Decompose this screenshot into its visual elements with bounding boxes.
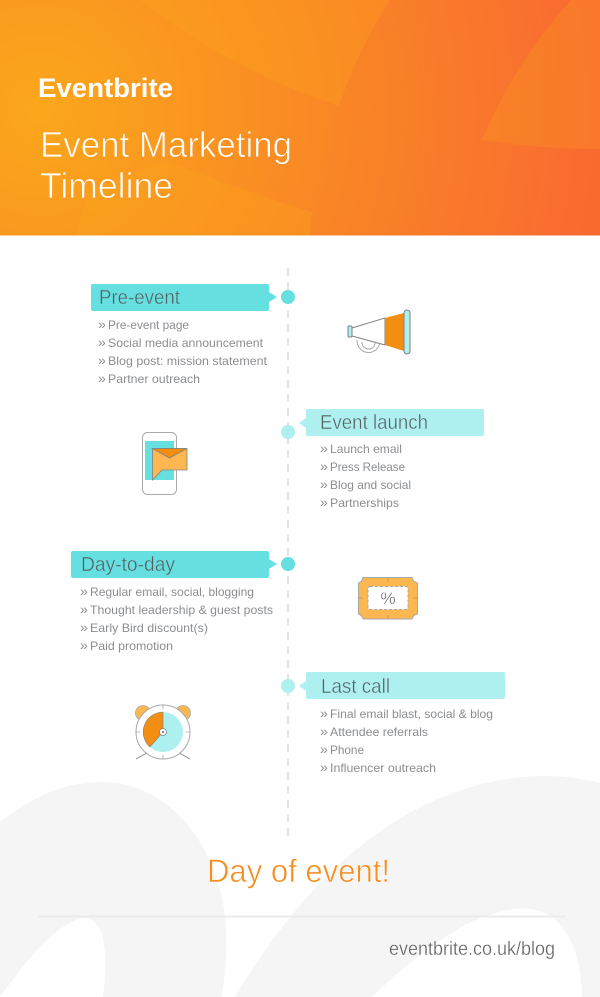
- list: launch tasks: »: [320, 440, 328, 456]
- list: day-to-day tasks: »: [80, 601, 88, 617]
- footer URL: eventbrite.co.uk/blog: [389, 939, 555, 960]
- list: last call tasks: »: [320, 705, 328, 721]
- timeline dot: [281, 557, 295, 571]
- list: last call tasks: Influencer outreach: [330, 761, 436, 775]
- list: day-to-day tasks: »: [80, 619, 88, 635]
- list: launch tasks: Press Release: [330, 460, 405, 474]
- list: launch tasks: Blog and social: [330, 478, 411, 492]
- header banner: [0, 0, 600, 236]
- label: Pre-event: [91, 284, 277, 311]
- icon: discount ticket: %: [380, 589, 396, 608]
- title: [40, 124, 292, 206]
- title: Event Marketing: [40, 124, 292, 165]
- closing heading: Day of event: Day of event!: [207, 853, 390, 889]
- list: last call tasks: Phone: [330, 743, 364, 757]
- icon: megaphone: [348, 310, 410, 354]
- list: day-to-day tasks: Paid promotion: [90, 639, 173, 653]
- list: last call tasks: Attendee referrals: [330, 725, 428, 739]
- list: Pre-event tasks: »: [98, 370, 106, 386]
- list: day-to-day tasks: [80, 583, 273, 653]
- list: last call tasks: Final email blast, social & blog: [330, 707, 493, 721]
- list: Pre-event tasks: »: [98, 334, 106, 350]
- title: Timeline: [40, 165, 173, 206]
- label: Event launch: [299, 409, 484, 436]
- list: last call tasks: »: [320, 759, 328, 775]
- list: Pre-event tasks: Social media announcement: [108, 336, 264, 350]
- list: day-to-day tasks: Regular email, social, blogging: [90, 585, 254, 599]
- timeline dot: [281, 425, 295, 439]
- list: launch tasks: Launch email: [330, 442, 402, 456]
- list: Pre-event tasks: Pre-event page: [108, 318, 189, 332]
- list: launch tasks: Partnerships: [330, 496, 399, 510]
- list: day-to-day tasks: »: [80, 583, 88, 599]
- section: Pre-event: [91, 284, 410, 386]
- list: last call tasks: »: [320, 723, 328, 739]
- icon: discount ticket: [358, 578, 418, 619]
- label: Day-to-day: [71, 551, 277, 578]
- list: launch tasks: »: [320, 458, 328, 474]
- list: last call tasks: [320, 705, 493, 775]
- label: Day-to-day: Day-to-day: [81, 554, 175, 576]
- label: Event launch: Event launch: [320, 412, 428, 434]
- list: launch tasks: »: [320, 476, 328, 492]
- label: Pre-event: Pre-event: [99, 287, 180, 309]
- list: day-to-day tasks: Early Bird discount(s): [90, 621, 208, 635]
- list: Pre-event tasks: [98, 316, 268, 386]
- list: day-to-day tasks: Thought leadership & guest posts: [90, 603, 273, 617]
- timeline dot: [281, 679, 295, 693]
- list: day-to-day tasks: »: [80, 637, 88, 653]
- list: last call tasks: »: [320, 741, 328, 757]
- icon: alarm clock: [136, 705, 190, 759]
- list: launch tasks: [320, 440, 411, 510]
- section: Event launch: [142, 409, 484, 510]
- icon: phone with envelope: [142, 432, 187, 494]
- list: Pre-event tasks: »: [98, 352, 106, 368]
- section: Day-to-day: [71, 551, 418, 653]
- timeline dashed line: [287, 268, 289, 837]
- list: launch tasks: »: [320, 494, 328, 510]
- list: Pre-event tasks: »: [98, 316, 106, 332]
- list: Pre-event tasks: Partner outreach: [108, 372, 200, 386]
- background swooshes: [0, 776, 600, 997]
- logo: Eventbrite: Eventbrite: [38, 73, 173, 103]
- label: Last call: [299, 672, 505, 699]
- label: Last call: Last call: [321, 676, 390, 698]
- timeline dot: [281, 290, 295, 304]
- list: Pre-event tasks: Blog post: mission statement: [108, 354, 268, 368]
- section: Last call: [136, 672, 505, 775]
